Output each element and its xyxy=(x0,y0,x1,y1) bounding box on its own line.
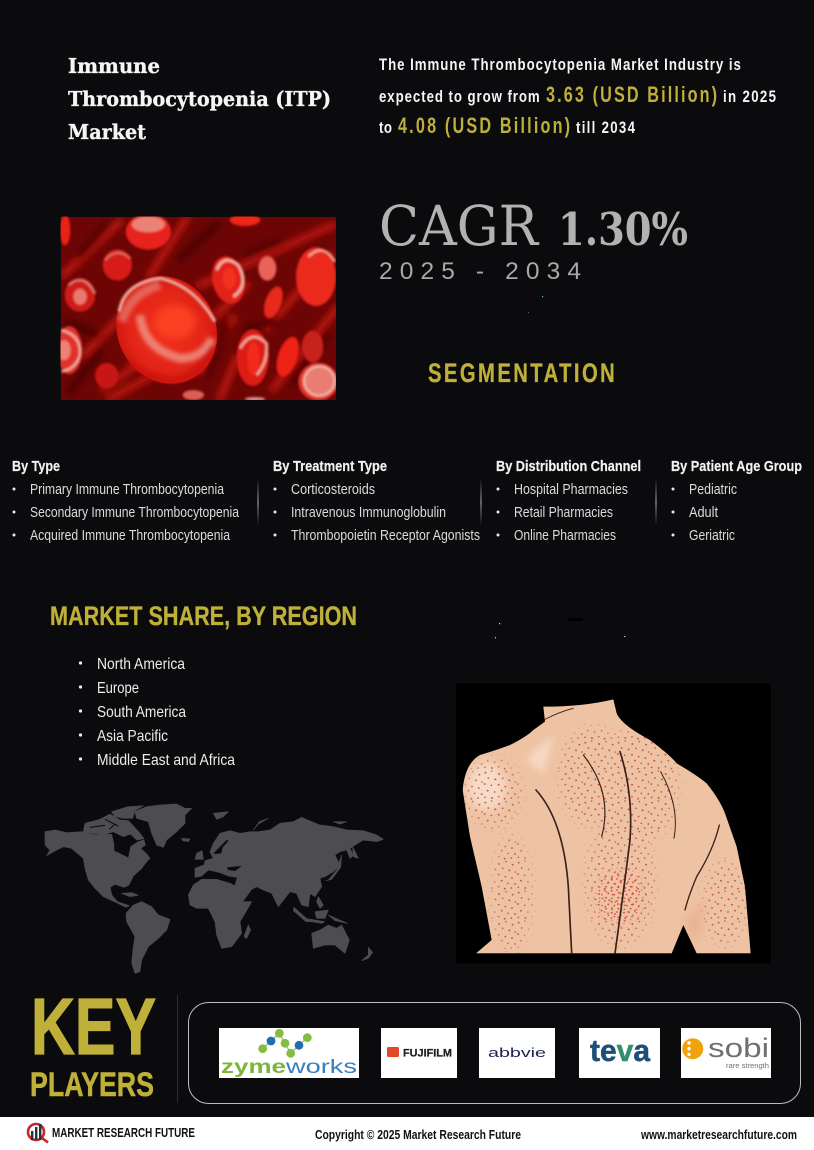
small cells xyxy=(57,214,338,401)
heading: market share by region: MARKET SHARE, BY REGION xyxy=(50,601,357,631)
CAGR label: CAGR xyxy=(379,194,540,258)
CAGR value: 1.30% xyxy=(558,203,688,256)
panel: by treatment type xyxy=(273,458,480,544)
logo: sobi: rare strength xyxy=(726,1063,769,1070)
logo: zymeworks xyxy=(219,1028,359,1078)
logo: zymeworks: zyme xyxy=(221,1057,286,1078)
title: Thrombocytopenia (ITP) xyxy=(68,87,331,111)
panel: by patient age group: Geriatric xyxy=(689,528,735,544)
panel: by type: Acquired Immune Thrombocytopenia xyxy=(30,528,231,544)
background streaks xyxy=(63,218,337,398)
panel: by treatment type: Thrombopoietin Receptor Agonists xyxy=(291,528,480,544)
panel: by patient age group: Pediatric xyxy=(689,482,737,498)
market summary text: in 2025 xyxy=(723,88,776,106)
heading: key players: PLAYERS xyxy=(30,1066,154,1104)
region list: North America xyxy=(97,656,185,673)
panel: by treatment type: Intravenous Immunoglobulin xyxy=(291,505,446,521)
africa xyxy=(188,879,252,948)
south america xyxy=(126,902,170,973)
specks xyxy=(495,296,626,638)
large centre cell xyxy=(116,275,218,386)
market summary text xyxy=(379,56,776,139)
panel: by treatment type: Corticosteroids xyxy=(291,482,375,498)
logo: market research future: MARKET RESEARCH FUTURE xyxy=(52,1125,195,1140)
title: Immune xyxy=(68,54,160,78)
logo: abbvie xyxy=(479,1028,555,1078)
panel: by distribution channel: Hospital Pharmacies xyxy=(514,482,628,498)
logo: market research future xyxy=(28,1124,195,1142)
logo: sobi xyxy=(681,1028,771,1078)
logo: teva xyxy=(579,1028,660,1078)
panel: by distribution channel: Retail Pharmacies xyxy=(514,505,613,521)
market summary text: expected to grow from xyxy=(379,88,540,106)
panel: by treatment type: By Treatment Type xyxy=(273,458,387,475)
region list: Europe xyxy=(97,680,139,697)
panel: by distribution channel: Online Pharmacies xyxy=(514,528,616,544)
panel: key players logos xyxy=(188,1002,800,1104)
region list: South America xyxy=(97,704,186,721)
market summary text: 4.08 (USD Billion) xyxy=(398,113,570,139)
CAGR block xyxy=(379,194,688,285)
region list: Middle East and Africa xyxy=(97,752,235,769)
logo: fujifilm xyxy=(381,1028,457,1078)
image: red blood cells xyxy=(57,214,338,402)
heading: key players xyxy=(30,982,156,1104)
world map xyxy=(45,804,383,973)
market summary text: The Immune Thrombocytopenia Market Industry is xyxy=(379,56,741,74)
region list xyxy=(79,656,235,769)
heading: key players: KEY xyxy=(31,982,156,1071)
market summary text: to xyxy=(379,119,392,137)
arctic islands xyxy=(83,814,144,840)
panel: by patient age group: Adult xyxy=(689,505,718,521)
australia and islands xyxy=(312,925,349,953)
region list: Asia Pacific xyxy=(97,728,168,745)
market summary text: till 2034 xyxy=(576,119,635,137)
panel: by type: By Type xyxy=(12,458,60,475)
north america xyxy=(45,830,150,907)
heading: segmentation: SEGMENTATION xyxy=(428,358,615,389)
market summary text: 3.63 (USD Billion) xyxy=(546,82,717,108)
panel: by type: Secondary Immune Thrombocytopenia xyxy=(30,505,240,521)
panel: by distribution channel: By Distribution Channel xyxy=(496,458,641,475)
CAGR period: 2025 - 2034 xyxy=(379,258,581,285)
title: Market xyxy=(68,120,146,144)
panel: by type: Primary Immune Thrombocytopenia xyxy=(30,482,225,498)
copyright: Copyright © 2025 Market Research Future xyxy=(315,1127,521,1142)
panel: by type xyxy=(12,458,240,544)
logo: sobi: sobi xyxy=(708,1033,769,1063)
logo: teva: teva xyxy=(590,1033,651,1068)
panel: by patient age group xyxy=(671,458,802,544)
panel: by distribution channel xyxy=(496,458,641,544)
footer xyxy=(0,1117,814,1150)
logo: fujifilm: FUJIFILM xyxy=(403,1048,452,1060)
greenland xyxy=(135,804,192,847)
eurasia xyxy=(195,817,383,907)
logo: zymeworks: works xyxy=(285,1057,357,1078)
title xyxy=(68,54,331,144)
logo: abbvie: abbvie xyxy=(488,1046,546,1060)
image: back with petechiae rash xyxy=(456,683,771,963)
